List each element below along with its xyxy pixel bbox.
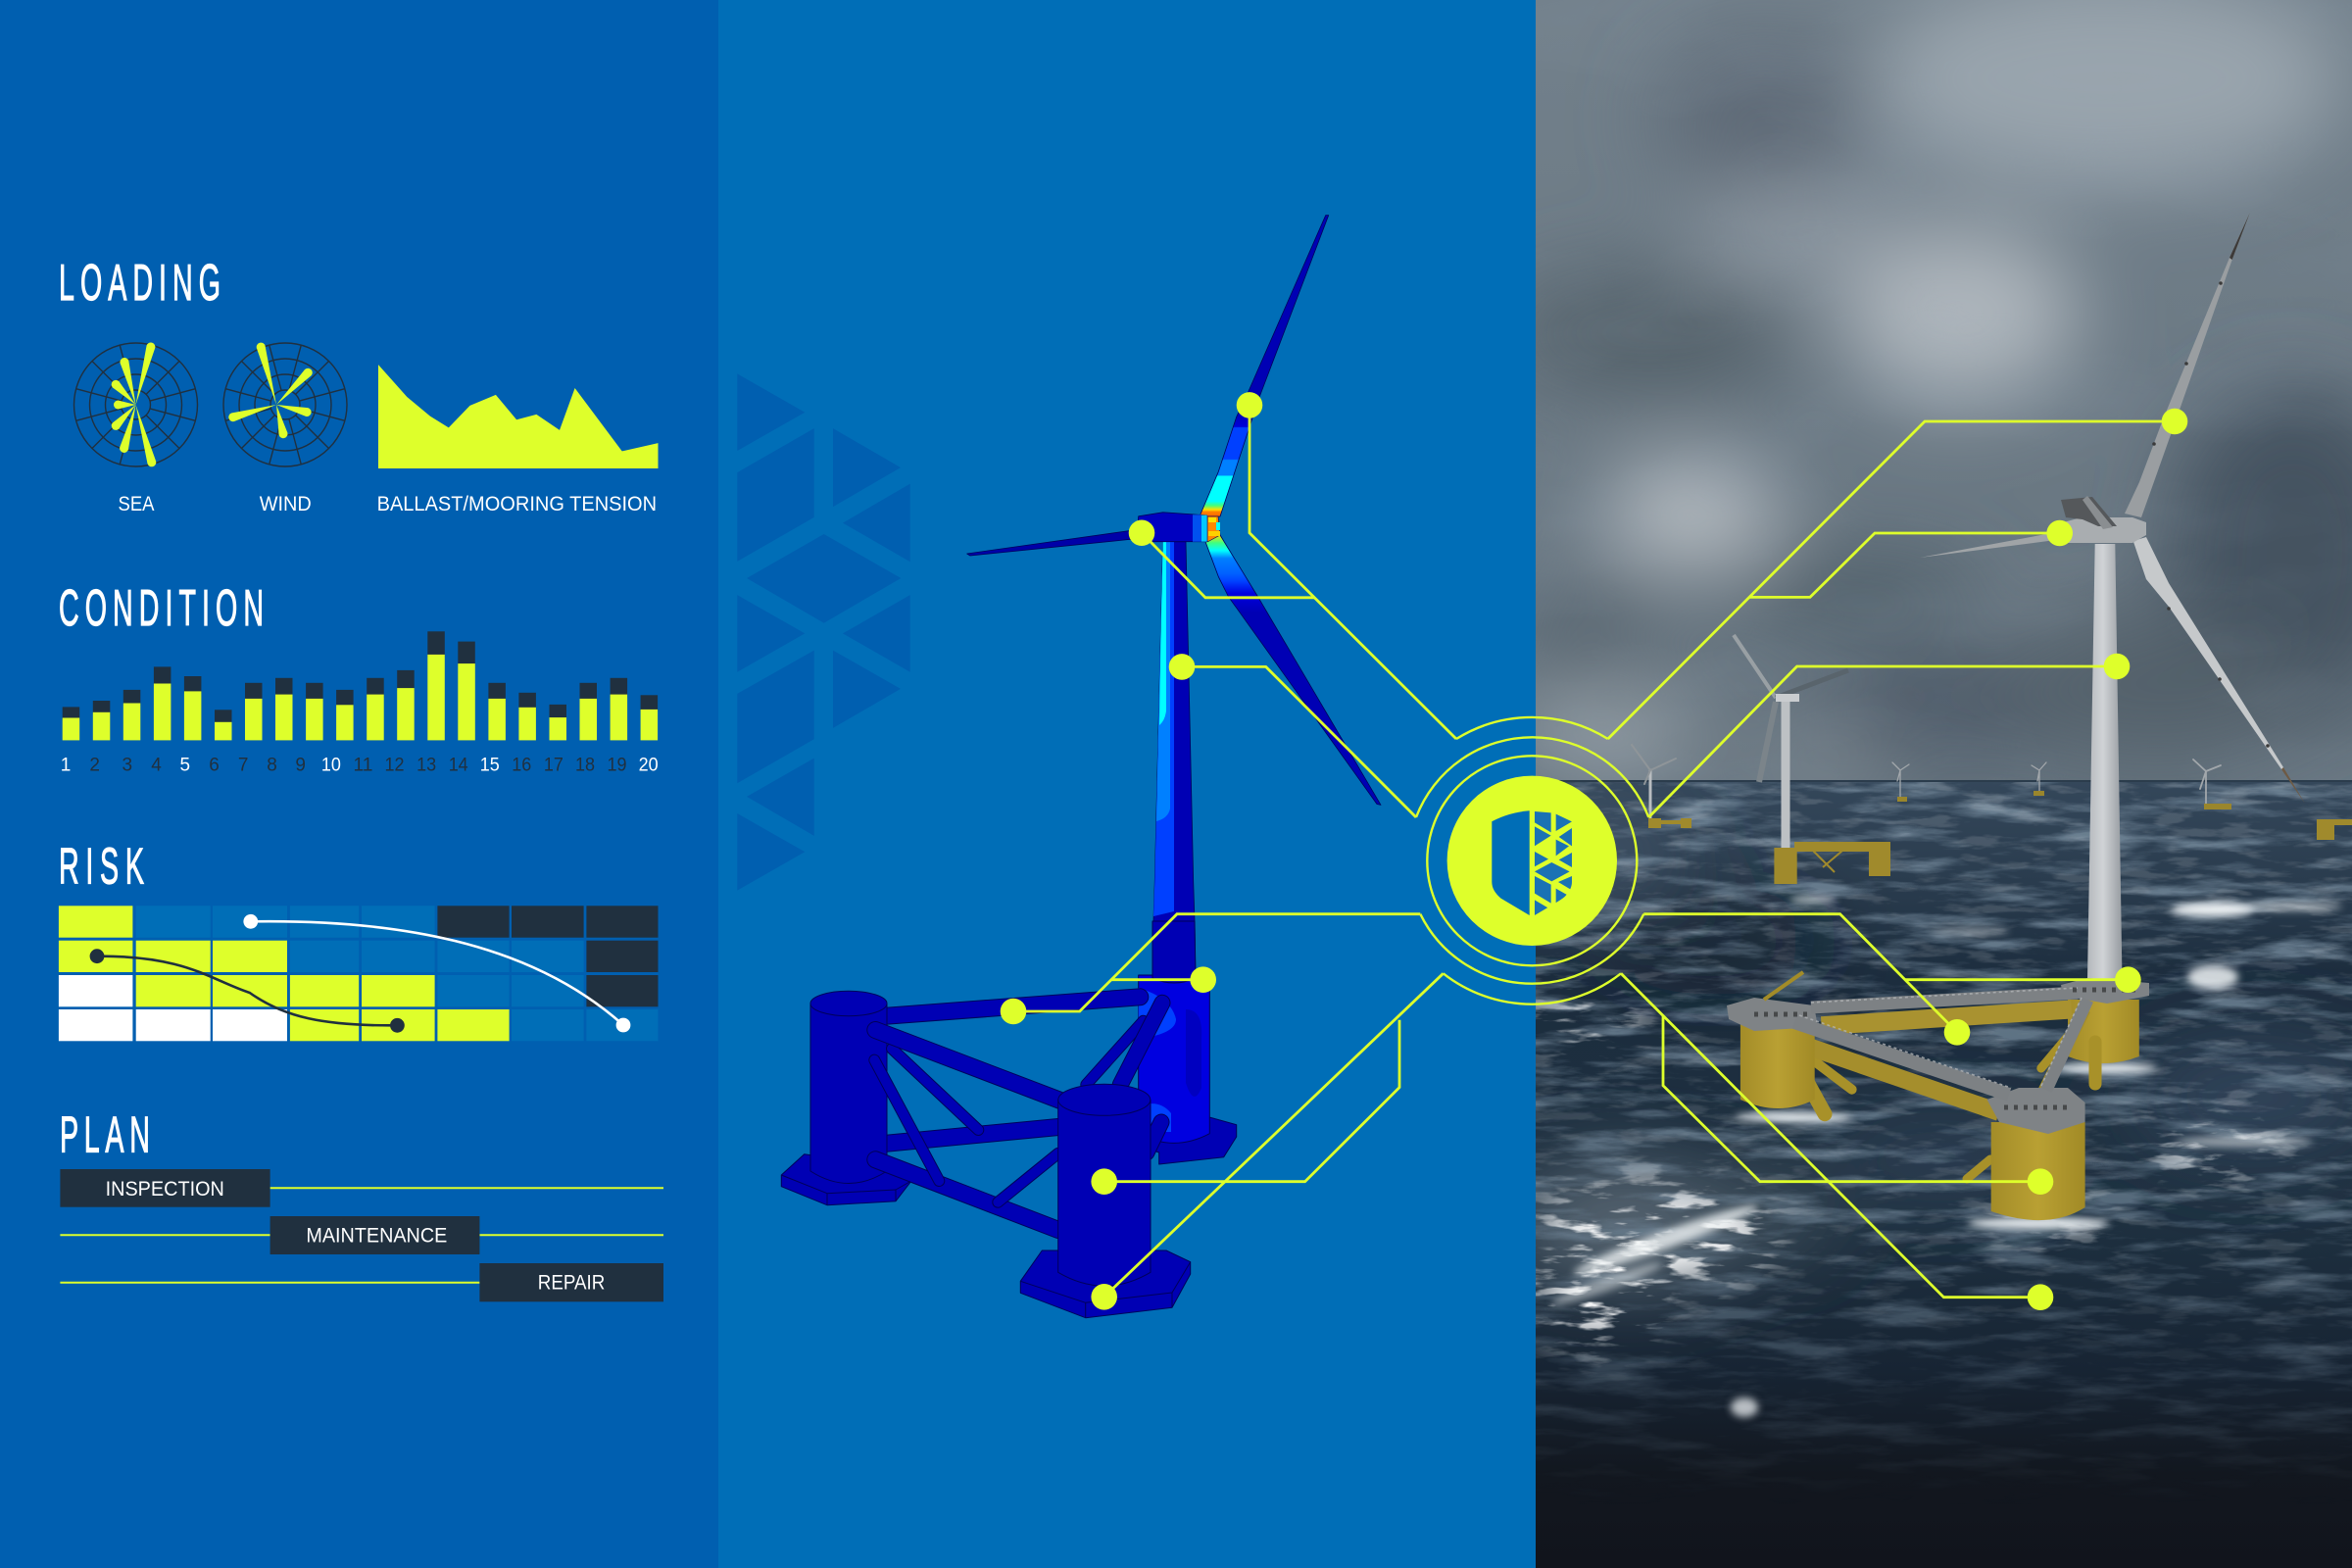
- tower: [2087, 544, 2123, 980]
- chart: simulated floating platform model: [781, 921, 1237, 1318]
- axis labels: condition bars: 18: [575, 755, 595, 775]
- blades: [1920, 534, 2062, 558]
- tower base overlap: [1152, 921, 1196, 983]
- left column: [810, 1004, 887, 1184]
- decks and walkways: [1727, 978, 2149, 1134]
- rear hex base: [1127, 1117, 1237, 1164]
- repair bar: REPAIR: [538, 1272, 605, 1295]
- icon: yellow floating platform photo: [1727, 972, 2158, 1229]
- axis labels: condition bars: 7: [238, 755, 248, 775]
- label: sea: SEA: [118, 493, 155, 515]
- axis labels: condition bars: 9: [295, 755, 306, 775]
- inspection bar: [60, 1169, 270, 1207]
- sea: [1490, 781, 2352, 1568]
- panel: storm sky and sea photo: [1490, 0, 2352, 1568]
- tower: [1152, 542, 1196, 980]
- chart: condition stacked bars: [63, 631, 658, 740]
- axis labels: condition bars: 20: [639, 755, 659, 775]
- chart: plan timeline: [60, 1169, 663, 1301]
- chart: simulated turbine stress model: [967, 216, 1381, 980]
- nacelle: [1137, 513, 1207, 542]
- heading: risk: RISK: [59, 837, 144, 894]
- chart: risk matrix: [59, 906, 658, 1041]
- label: ballast/mooring tension: BALLAST/MOORING TENSION: [377, 493, 657, 515]
- axis labels: condition bars: 5: [180, 755, 190, 775]
- diagonal braces: [874, 1030, 1061, 1230]
- foam crests: [1549, 896, 2342, 1417]
- inspection bar: INSPECTION: [106, 1178, 224, 1200]
- label: wind: WIND: [260, 493, 312, 515]
- chart: ballast and mooring tension area: [378, 365, 659, 468]
- row 1: [59, 906, 132, 938]
- axis labels: condition bars: 14: [449, 755, 468, 775]
- rear column: [1139, 975, 1209, 1143]
- heading: loading: LOADING: [59, 254, 220, 311]
- axis labels: condition bars: 13: [416, 755, 436, 775]
- hub: [1207, 516, 1220, 542]
- icon: main turbine photo: [1920, 213, 2305, 980]
- blade left: [967, 528, 1152, 556]
- dark risk curve: [90, 949, 405, 1033]
- icon: connector dots on photo: [1944, 409, 2187, 1310]
- axis labels: condition bars: 15: [480, 755, 500, 775]
- chart: wind rose: [223, 342, 347, 466]
- icon: brand triangle pattern: [737, 373, 910, 891]
- blade up: [1200, 216, 1329, 516]
- axis labels: condition bars: 6: [209, 755, 220, 775]
- row 4: [59, 1009, 132, 1041]
- row 2: [59, 941, 132, 972]
- heading: condition: CONDITION: [59, 579, 264, 636]
- white risk curve: [243, 914, 630, 1032]
- nacelle: [2060, 517, 2146, 543]
- axis labels: condition bars: 2: [89, 755, 100, 775]
- axis labels: condition bars: 3: [122, 755, 132, 775]
- far column: [2068, 1000, 2139, 1063]
- panel: centre simulation panel background: [718, 0, 1536, 1568]
- axis labels: condition bars: 10: [321, 755, 341, 775]
- front column: [1991, 1122, 2085, 1220]
- row 3: [59, 975, 132, 1006]
- maintenance bar: [270, 1216, 479, 1254]
- front hex base: [1020, 1250, 1191, 1318]
- chart: sea rose: [74, 341, 198, 467]
- axis labels: condition bars: 1: [61, 755, 71, 775]
- braces: [1801, 1032, 2095, 1179]
- axis labels: condition bars: 17: [544, 755, 564, 775]
- axis labels: condition bars: 8: [267, 755, 277, 775]
- axis labels: condition bars: 4: [151, 755, 162, 775]
- axis labels: condition bars: 16: [512, 755, 531, 775]
- heading: plan: PLAN: [60, 1106, 150, 1163]
- left column: [1740, 1024, 1815, 1108]
- axis labels: condition bars: 11: [353, 755, 372, 775]
- icon: connector lines: [1013, 405, 2175, 1298]
- axis labels: condition bars: [61, 755, 659, 775]
- icon: distant turbines and floaters: [1632, 635, 2352, 883]
- maintenance bar: MAINTENANCE: [306, 1224, 447, 1247]
- icon: connector dots on model: [1001, 392, 1262, 1310]
- panel: left data panel background: [0, 0, 718, 1568]
- pontoons: [1822, 1009, 2072, 1026]
- lower and upper pontoons: [887, 997, 1162, 1152]
- icon: central hub rings and shield logo: [1416, 717, 1648, 1004]
- axis labels: condition bars: 12: [384, 755, 404, 775]
- front column: [1058, 1100, 1151, 1286]
- horizon: [1536, 780, 2352, 782]
- repair bar: [479, 1263, 663, 1301]
- left hex base: [781, 1154, 911, 1205]
- foam at column bases: [1735, 1063, 2158, 1229]
- sky: [1499, 0, 2352, 783]
- blade down: [1205, 535, 1381, 805]
- axis labels: condition bars: 19: [608, 755, 627, 775]
